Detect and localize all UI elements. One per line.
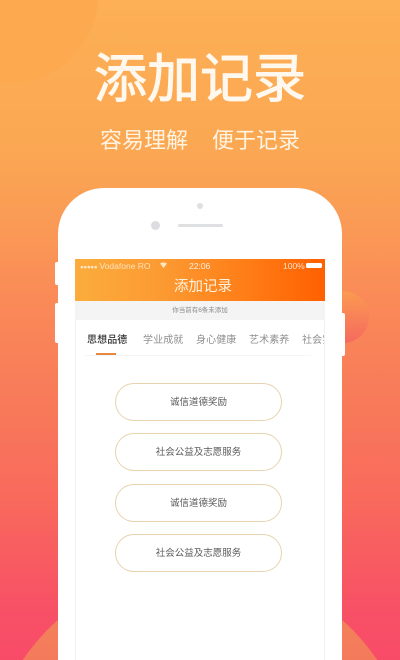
notice bar: 你当前有6条未添加 — [172, 307, 228, 314]
notice bar — [75, 301, 325, 320]
title: 添加记录 — [94, 50, 306, 109]
wifi icon — [160, 262, 167, 268]
decorative circle: bottom — [23, 620, 377, 660]
tab: 艺术素养: 艺术素养 — [249, 335, 289, 346]
button 4: 社会公益及志愿服务 — [156, 548, 241, 559]
button 2 — [115, 433, 282, 471]
app header — [75, 259, 325, 301]
button 1 — [115, 383, 282, 421]
speaker — [178, 224, 223, 227]
speaker dot — [197, 203, 203, 209]
status bar battery text: 100% — [283, 261, 305, 271]
status bar carrier: ●●●●● Vodafone RO — [80, 261, 151, 271]
tab: 身心健康: 身心健康 — [196, 335, 236, 346]
screen — [75, 259, 325, 660]
button 4 — [115, 534, 282, 572]
phone side buttons — [55, 262, 345, 356]
tab: active: 思想品德 — [87, 335, 127, 346]
tabs — [85, 334, 324, 356]
battery icon — [306, 263, 322, 268]
decorative circle: right — [317, 291, 369, 343]
active tab underline — [96, 353, 116, 355]
tab divider — [85, 355, 311, 356]
status bar time: 22:06 — [189, 261, 210, 271]
phone — [58, 188, 342, 660]
tab: 学业成就: 学业成就 — [143, 335, 183, 346]
camera — [151, 221, 160, 230]
button 2: 社会公益及志愿服务 — [156, 447, 241, 458]
header title: 添加记录 — [174, 279, 232, 295]
button 3 — [115, 484, 282, 522]
subtitle: 容易理解 便于记录 — [100, 128, 300, 153]
button 1: 诚信道德奖励 — [170, 397, 227, 408]
button 3: 诚信道德奖励 — [170, 498, 227, 509]
decorative circle: top left — [0, 0, 98, 83]
